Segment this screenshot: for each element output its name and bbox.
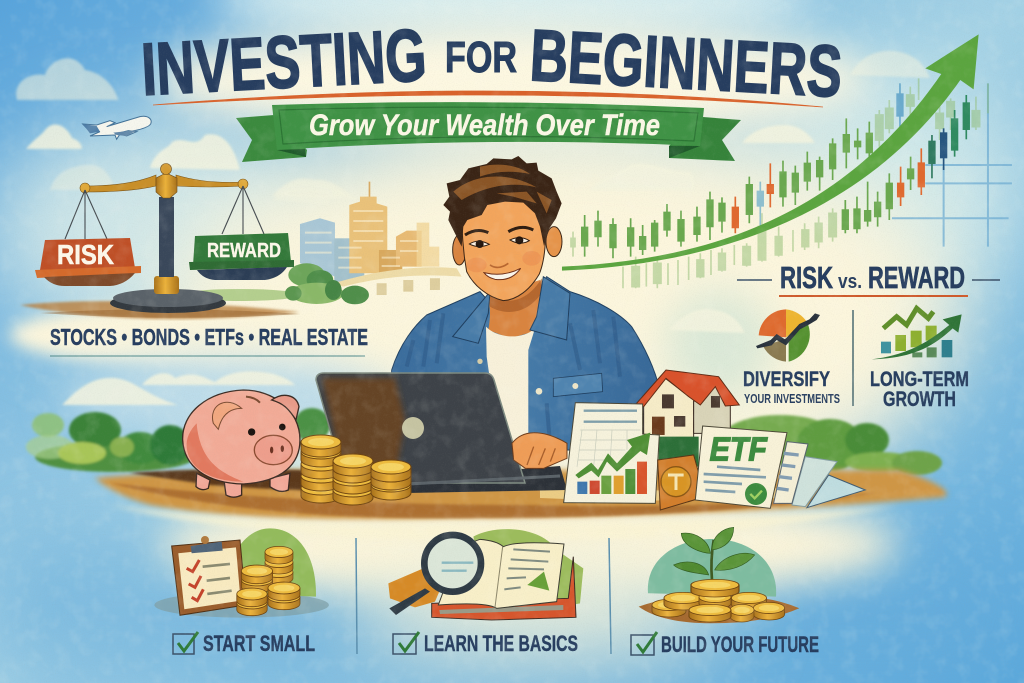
icon: diversify pie chart — [756, 309, 820, 362]
orange book with coin — [658, 455, 705, 510]
magnifying glass — [424, 535, 481, 592]
collar — [453, 277, 570, 343]
label: learn the basics — [393, 631, 578, 656]
label: long-term growth: GROWTH — [883, 388, 956, 411]
face — [462, 193, 546, 301]
chart paper — [564, 403, 659, 503]
t-shirt — [486, 327, 535, 450]
coins — [237, 546, 300, 616]
neck and chest — [487, 280, 552, 338]
subtitle ribbon — [236, 102, 741, 162]
risk vs reward heading: vs. — [838, 271, 862, 293]
candlestick chart — [562, 34, 1012, 288]
coin stacks — [301, 435, 411, 505]
title underline swoosh — [153, 91, 823, 107]
teal and navy candles — [757, 83, 970, 227]
hair — [443, 156, 562, 247]
pig snout — [254, 435, 292, 465]
bushes behind scale — [180, 263, 369, 304]
hand — [512, 433, 567, 468]
label: diversify: YOUR INVESTMENTS — [744, 392, 840, 406]
green candles — [581, 118, 914, 258]
risk vs reward heading — [737, 260, 1000, 296]
garden patch — [659, 437, 699, 467]
title — [139, 13, 844, 113]
chart grid — [892, 83, 1012, 247]
piggy bank — [183, 390, 300, 497]
pocket — [477, 359, 603, 397]
asset classes line: STOCKS • BONDS • ETFs • REAL ESTATE — [50, 324, 368, 350]
scale beam — [80, 164, 248, 198]
clipboard — [172, 536, 246, 615]
label: build your future: BUILD YOUR FUTURE — [661, 632, 819, 657]
shirt folds — [407, 310, 620, 443]
subtitle text: Grow Your Wealth Over Time — [309, 109, 660, 142]
divider — [356, 538, 357, 654]
title: FOR — [445, 33, 517, 82]
icon: long-term growth bars — [872, 308, 962, 359]
shirt — [390, 277, 660, 450]
scale strings — [65, 186, 264, 239]
pig legs — [196, 473, 290, 497]
label: learn the basics: LEARN THE BASICS — [424, 631, 578, 656]
label: start small — [173, 631, 315, 656]
nose — [490, 263, 508, 267]
divider — [852, 310, 854, 406]
reward pan: REWARD — [207, 240, 281, 262]
title: INVESTING — [139, 13, 428, 111]
laptop — [316, 373, 567, 494]
airplane — [83, 116, 151, 139]
label: diversify: DIVERSIFY — [743, 368, 830, 391]
background bushes and trees — [26, 408, 942, 475]
person — [390, 156, 660, 450]
pig eyes — [248, 428, 255, 436]
title: BEGINNERS — [528, 15, 844, 113]
balance scale — [35, 164, 294, 313]
ears — [453, 235, 466, 265]
red candles — [732, 148, 925, 233]
pig coin slot — [246, 397, 260, 403]
risk vs reward heading: REWARD — [868, 260, 965, 295]
back sheet papers — [807, 475, 865, 508]
table surface — [95, 469, 947, 541]
label: long-term growth: LONG-TERM — [870, 368, 969, 391]
label: long-term growth — [870, 368, 969, 411]
documents: chart, house, ETF — [564, 370, 865, 510]
ETF sheet: ETF — [710, 432, 768, 469]
icon: build your future — [639, 527, 799, 623]
risk pan — [35, 238, 141, 286]
smile — [484, 268, 521, 280]
eyes and brows — [465, 227, 533, 248]
bridge — [333, 267, 462, 287]
house — [636, 370, 739, 440]
pig body — [183, 390, 300, 484]
faded background candles — [571, 78, 988, 288]
ETF sheet — [695, 426, 787, 508]
sky clouds — [16, 51, 930, 405]
label: build your future — [631, 632, 819, 657]
label: diversify — [743, 368, 840, 406]
divider — [609, 538, 611, 654]
scale base — [110, 276, 226, 313]
risk pan: RISK — [57, 239, 114, 270]
ground under scale — [20, 301, 300, 319]
icon: learn the basics — [388, 529, 583, 620]
scale post — [159, 197, 174, 277]
icon: start small — [154, 528, 329, 618]
pig ears — [212, 402, 242, 429]
city skyline — [300, 182, 462, 295]
growth arrow — [562, 34, 979, 271]
label: start small: START SMALL — [203, 631, 315, 656]
risk vs reward heading: RISK — [780, 260, 833, 295]
reward pan — [189, 233, 294, 280]
